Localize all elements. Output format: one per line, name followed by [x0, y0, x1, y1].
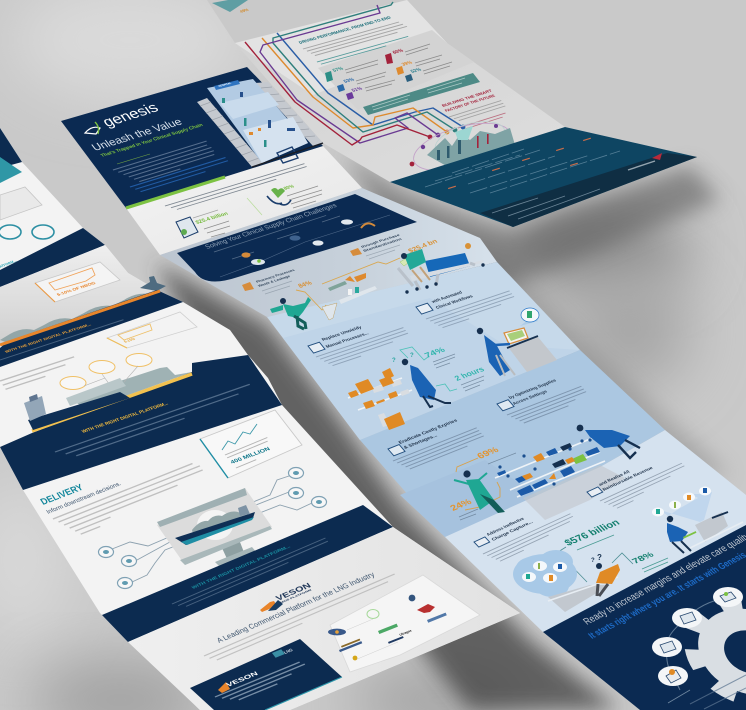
photo fragment	[212, 0, 248, 12]
Veson logo: VESON	[274, 581, 313, 603]
stat card with chart	[200, 410, 302, 478]
stats block: 51%	[351, 86, 364, 94]
white section text	[0, 357, 80, 389]
line chart	[222, 424, 257, 450]
navy product box	[190, 639, 342, 710]
figure: woman in teal	[270, 297, 311, 329]
monitor illustration	[157, 488, 272, 567]
connector orange	[456, 458, 478, 472]
navy band: top	[0, 228, 105, 287]
stat: 84%: 84%	[297, 280, 314, 290]
heading on navy band: WITH THE RIGHT DIGITAL PLATFORM...	[81, 401, 169, 434]
panel: left sheet (LNG commercial platform)	[0, 128, 520, 710]
circle icons on connectors	[98, 468, 326, 588]
hospital illustration	[197, 79, 323, 167]
connector teal, right	[612, 553, 633, 564]
ship superstructure, band two	[140, 276, 166, 291]
pale band	[445, 430, 746, 632]
body text: blue	[130, 158, 230, 193]
outlined stat card	[0, 187, 42, 220]
partner logos: Ultragas	[399, 628, 412, 637]
stat: 74%: 74%	[423, 346, 447, 360]
figure: woman in blue with question marks: ?	[392, 358, 396, 364]
heading: grey panel right: through Purchase	[360, 233, 401, 249]
footer strip text and logo	[492, 153, 662, 219]
section heading: Solving Your Clinical Supply Chain Challenges	[204, 202, 339, 251]
navy band: WITH THE RIGHT DIGITAL PLATFORM	[0, 355, 282, 490]
heading: grey panel right	[350, 233, 403, 259]
section: and realize all reimbursable revenue: and Realize All	[597, 469, 631, 487]
route end nodes	[428, 125, 465, 139]
section: eradicate costly expiries and shortages	[388, 418, 486, 472]
large stat: 400 MILLION	[230, 446, 272, 466]
gold outlined card: 5-10%	[123, 337, 137, 344]
hospital bed	[398, 243, 485, 294]
body text	[204, 574, 400, 663]
circle icons on gear	[652, 587, 743, 686]
green stripe	[126, 177, 225, 208]
heading: DELIVERY: DELIVERY	[39, 482, 86, 507]
metro lines	[245, 2, 463, 145]
teal header panel	[0, 157, 22, 183]
panel: right sheet (smart factory)	[207, 0, 697, 227]
section: with automated clinical workflows	[416, 290, 519, 330]
navy product box: LNG	[283, 647, 294, 655]
subtitle: That's Trapped in Your Clinical Supply Chain	[100, 123, 204, 159]
navy product box: VESON	[226, 671, 260, 689]
stats block: 53%	[343, 77, 356, 85]
navy header fragment	[0, 128, 22, 168]
section: and realize all reimbursable revenue	[587, 463, 692, 512]
body text	[449, 100, 505, 122]
hospital illustration: HOSPITAL	[217, 81, 232, 88]
heading: building the smart factory: FACTORY OF THE FUTURE	[444, 93, 496, 113]
timeline	[220, 215, 390, 277]
stats block: 52%	[410, 67, 423, 75]
section: and realize all reimbursable revenue: Reimbursable Revenue	[601, 465, 654, 492]
slightly darker lower band	[400, 460, 540, 537]
navy hero	[61, 67, 323, 208]
gold outlined card	[107, 312, 197, 348]
connector teal	[558, 547, 587, 582]
ship on navy band	[24, 378, 130, 430]
section: address ineffective charge capture: Address Ineffective	[485, 516, 526, 537]
navy footer	[543, 525, 746, 710]
smart factory city illustration	[408, 114, 516, 180]
panel: dark teal footer	[390, 127, 697, 227]
stat: 69%: 69%	[475, 445, 501, 461]
section: with automated clinical workflows: with Automated	[430, 290, 463, 304]
stat: hospital spend	[176, 210, 230, 238]
partner logos	[328, 595, 447, 660]
stat: 80%	[267, 184, 322, 208]
mid panel	[235, 0, 447, 95]
figure: person with light fan	[652, 486, 743, 553]
logo: genesis: genesis	[99, 100, 162, 130]
orange outlined stat card: 5-10% OF NBOG	[56, 280, 97, 297]
section: by optimizing supplies across settings	[497, 378, 591, 426]
stat captions	[577, 535, 668, 572]
heading: grey panel right: Standardization	[362, 237, 403, 253]
stat connectors	[400, 347, 428, 360]
heading: building the smart factory: BUILDING THE SMART	[441, 88, 494, 108]
connector: orange	[296, 290, 326, 310]
body text	[303, 21, 409, 57]
section: by optimizing supplies across settings: by Optimizing Supplies	[507, 378, 558, 400]
title: Unleash the Value	[90, 117, 185, 153]
shadow: top-right sheet	[345, 155, 720, 290]
gold circle icons	[60, 354, 152, 390]
navy band: bottom	[102, 505, 393, 642]
section: by optimizing supplies across settings: Across Settings	[511, 389, 549, 406]
section: replace unwieldy manual processes	[308, 325, 412, 368]
footer body rule	[668, 690, 690, 703]
stats block: 39%	[401, 60, 414, 68]
bin	[322, 303, 337, 320]
stats block: 57%	[332, 66, 345, 74]
body text on bottom band	[172, 538, 330, 610]
section: address ineffective charge capture	[474, 514, 580, 565]
stat: 2 hours: 2 hours	[453, 365, 487, 383]
section: replace unwieldy manual processes: Manual Processes...	[325, 331, 369, 349]
stats block	[332, 48, 423, 94]
figure: person thinking at desk: ?	[597, 553, 602, 562]
Veson logo	[260, 581, 313, 612]
body text: intro	[113, 141, 219, 186]
heading: grey panel left	[242, 268, 296, 294]
figure: woman in blue with question marks	[392, 353, 451, 407]
subheading: Inform downstream decisions.	[45, 481, 123, 516]
orange box shelves	[348, 368, 412, 430]
mid blue band	[360, 350, 665, 537]
figure: woman in blue with question marks: ?	[410, 353, 414, 359]
stat: 80%: 80%	[283, 184, 296, 192]
footer stats	[448, 138, 591, 189]
stat: 49%	[239, 7, 250, 14]
section: eradicate costly expiries and shortages: Eradicate Costly Expiries	[397, 418, 459, 445]
white band	[126, 146, 362, 255]
light blue band	[267, 262, 580, 440]
logo card	[330, 575, 480, 672]
shadow: centre sheet, falls in the gap beside the left sheet	[155, 262, 620, 710]
supply shelves	[495, 437, 625, 520]
gear illustration	[670, 590, 746, 710]
heading: grey panel left: Pharmacy Processes	[255, 268, 296, 284]
teal circle icons	[0, 225, 54, 239]
section: eradicate costly expiries and shortages: & Shortages...	[402, 433, 438, 450]
panel: darker footer strip	[480, 153, 697, 227]
band heading: WITH THE RIGHT DIGITAL PLATFORM...	[4, 323, 92, 354]
figure: person thinking at desk: ?	[591, 558, 595, 564]
teal callout bar	[363, 73, 480, 115]
Veson logo: IMOS PLATFORM	[278, 588, 312, 605]
navy band: second	[0, 290, 183, 367]
darker section inside light band	[283, 298, 580, 440]
body text: delivery	[53, 462, 211, 540]
cloud of icons	[513, 550, 577, 597]
divider	[247, 198, 262, 215]
stat band	[318, 30, 474, 110]
white band intro text	[165, 164, 309, 212]
navy section: solving your supply chain challenges	[177, 194, 417, 281]
top grey panel	[207, 0, 407, 43]
figure: person leaning over shelves	[577, 425, 640, 458]
short rule	[117, 154, 150, 164]
grey-blue band	[160, 188, 497, 317]
figure: person thinking at desk	[548, 553, 620, 612]
stat captions	[433, 354, 484, 391]
connector arc	[667, 597, 728, 690]
stat: 78%: 78%	[630, 550, 656, 565]
grey ship hull on white band	[68, 367, 192, 405]
heading: grey panel left: Waste & Leakage	[257, 274, 291, 288]
heading on bottom band: WITH THE RIGHT DIGITAL PLATFORM...	[191, 544, 291, 590]
stat captions	[459, 453, 516, 520]
heading: driving performance: DRIVING PERFORMANCE, FROM END-TO-END	[298, 15, 392, 45]
lower white section	[128, 527, 520, 710]
shelf items	[328, 273, 377, 304]
logo: genesis	[85, 100, 162, 134]
orange outlined stat card	[35, 262, 120, 302]
section: with automated clinical workflows: Clinical Workflows	[435, 294, 474, 310]
figure: doctor at computer	[477, 308, 557, 376]
footer text lines	[425, 149, 620, 193]
stat: hospital spend: $25.4 billion	[195, 211, 230, 226]
ship tanks, band two	[0, 292, 160, 343]
connector lines	[112, 476, 312, 582]
section: replace unwieldy manual processes: Replace Unwieldy	[321, 325, 363, 342]
figure: woman in teal holding items	[454, 470, 505, 513]
shadow: centre sheet upper right	[360, 196, 730, 476]
body text on navy band	[55, 384, 256, 461]
fold shading panel	[0, 245, 157, 345]
stats block: 60%	[392, 48, 405, 56]
gold stripe	[32, 374, 192, 431]
section subhead	[214, 215, 326, 252]
section: address ineffective charge capture: Charge Capture...	[490, 520, 534, 542]
stat colour bars	[325, 53, 413, 100]
stat: $25.4 billion: $25.4 bn	[407, 238, 439, 255]
orange stripe	[0, 291, 160, 345]
stat: $576 billion: $576 billion	[563, 518, 622, 548]
footer body text	[690, 675, 746, 709]
body text lines, band two	[0, 320, 124, 360]
stat: 24%: 24%	[448, 497, 474, 513]
stat captions	[345, 44, 452, 91]
heading: a leading commercial platform: A Leading Commercial Platform for the LNG Industry	[215, 570, 377, 645]
